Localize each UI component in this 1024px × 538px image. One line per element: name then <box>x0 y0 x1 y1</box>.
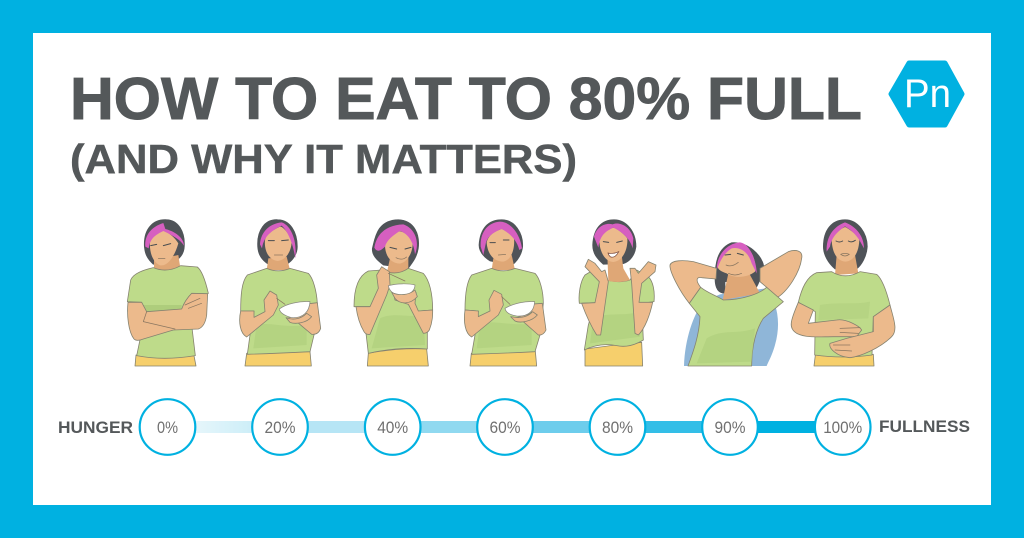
marker: 100% <box>815 399 870 455</box>
bar segment 20 to 40 <box>308 421 365 433</box>
label: hunger: HUNGER <box>58 419 133 437</box>
marker: 0%: 0% <box>157 418 178 437</box>
marker: 80% <box>590 399 645 455</box>
marker: 40% <box>365 399 421 455</box>
figure: 60% pausing with bowl <box>464 220 546 366</box>
bar segment 40 to 60 <box>420 421 477 433</box>
title: HOW TO EAT TO 80% FULL <box>70 66 862 132</box>
bar segment 80 to 90 <box>645 421 702 433</box>
marker: 20% <box>252 399 308 455</box>
scale bar: hunger to fullness <box>58 399 970 455</box>
bar segment 60 to 80 <box>533 421 590 433</box>
figure: 40% eating <box>354 220 433 366</box>
marker: 100%: 100% <box>823 418 862 437</box>
label: fullness: FULLNESS <box>879 418 970 436</box>
bar segment 0 to 20 <box>195 421 252 433</box>
subtitle: (AND WHY IT MATTERS) <box>70 136 577 182</box>
icon: Pn logo: Pn <box>904 72 951 116</box>
figure: 80% happy, hands up <box>579 220 656 366</box>
figure: 20% holding bowl <box>240 220 321 366</box>
figure: 90% leaning back, hands behind head <box>670 242 802 366</box>
figure: 0% arms crossed <box>127 220 208 366</box>
figure: 100% hands on belly <box>791 220 895 366</box>
marker: 20%: 20% <box>264 418 296 437</box>
marker: 80%: 80% <box>602 418 633 437</box>
marker: 60% <box>477 399 533 455</box>
marker: 90%: 90% <box>714 418 746 437</box>
marker: 90% <box>702 399 758 455</box>
marker: 60%: 60% <box>490 418 520 437</box>
bar segment 90 to 100 <box>758 421 815 433</box>
icon: Pn logo <box>891 63 962 125</box>
marker: 40%: 40% <box>377 418 408 437</box>
marker: 0% <box>140 399 195 455</box>
